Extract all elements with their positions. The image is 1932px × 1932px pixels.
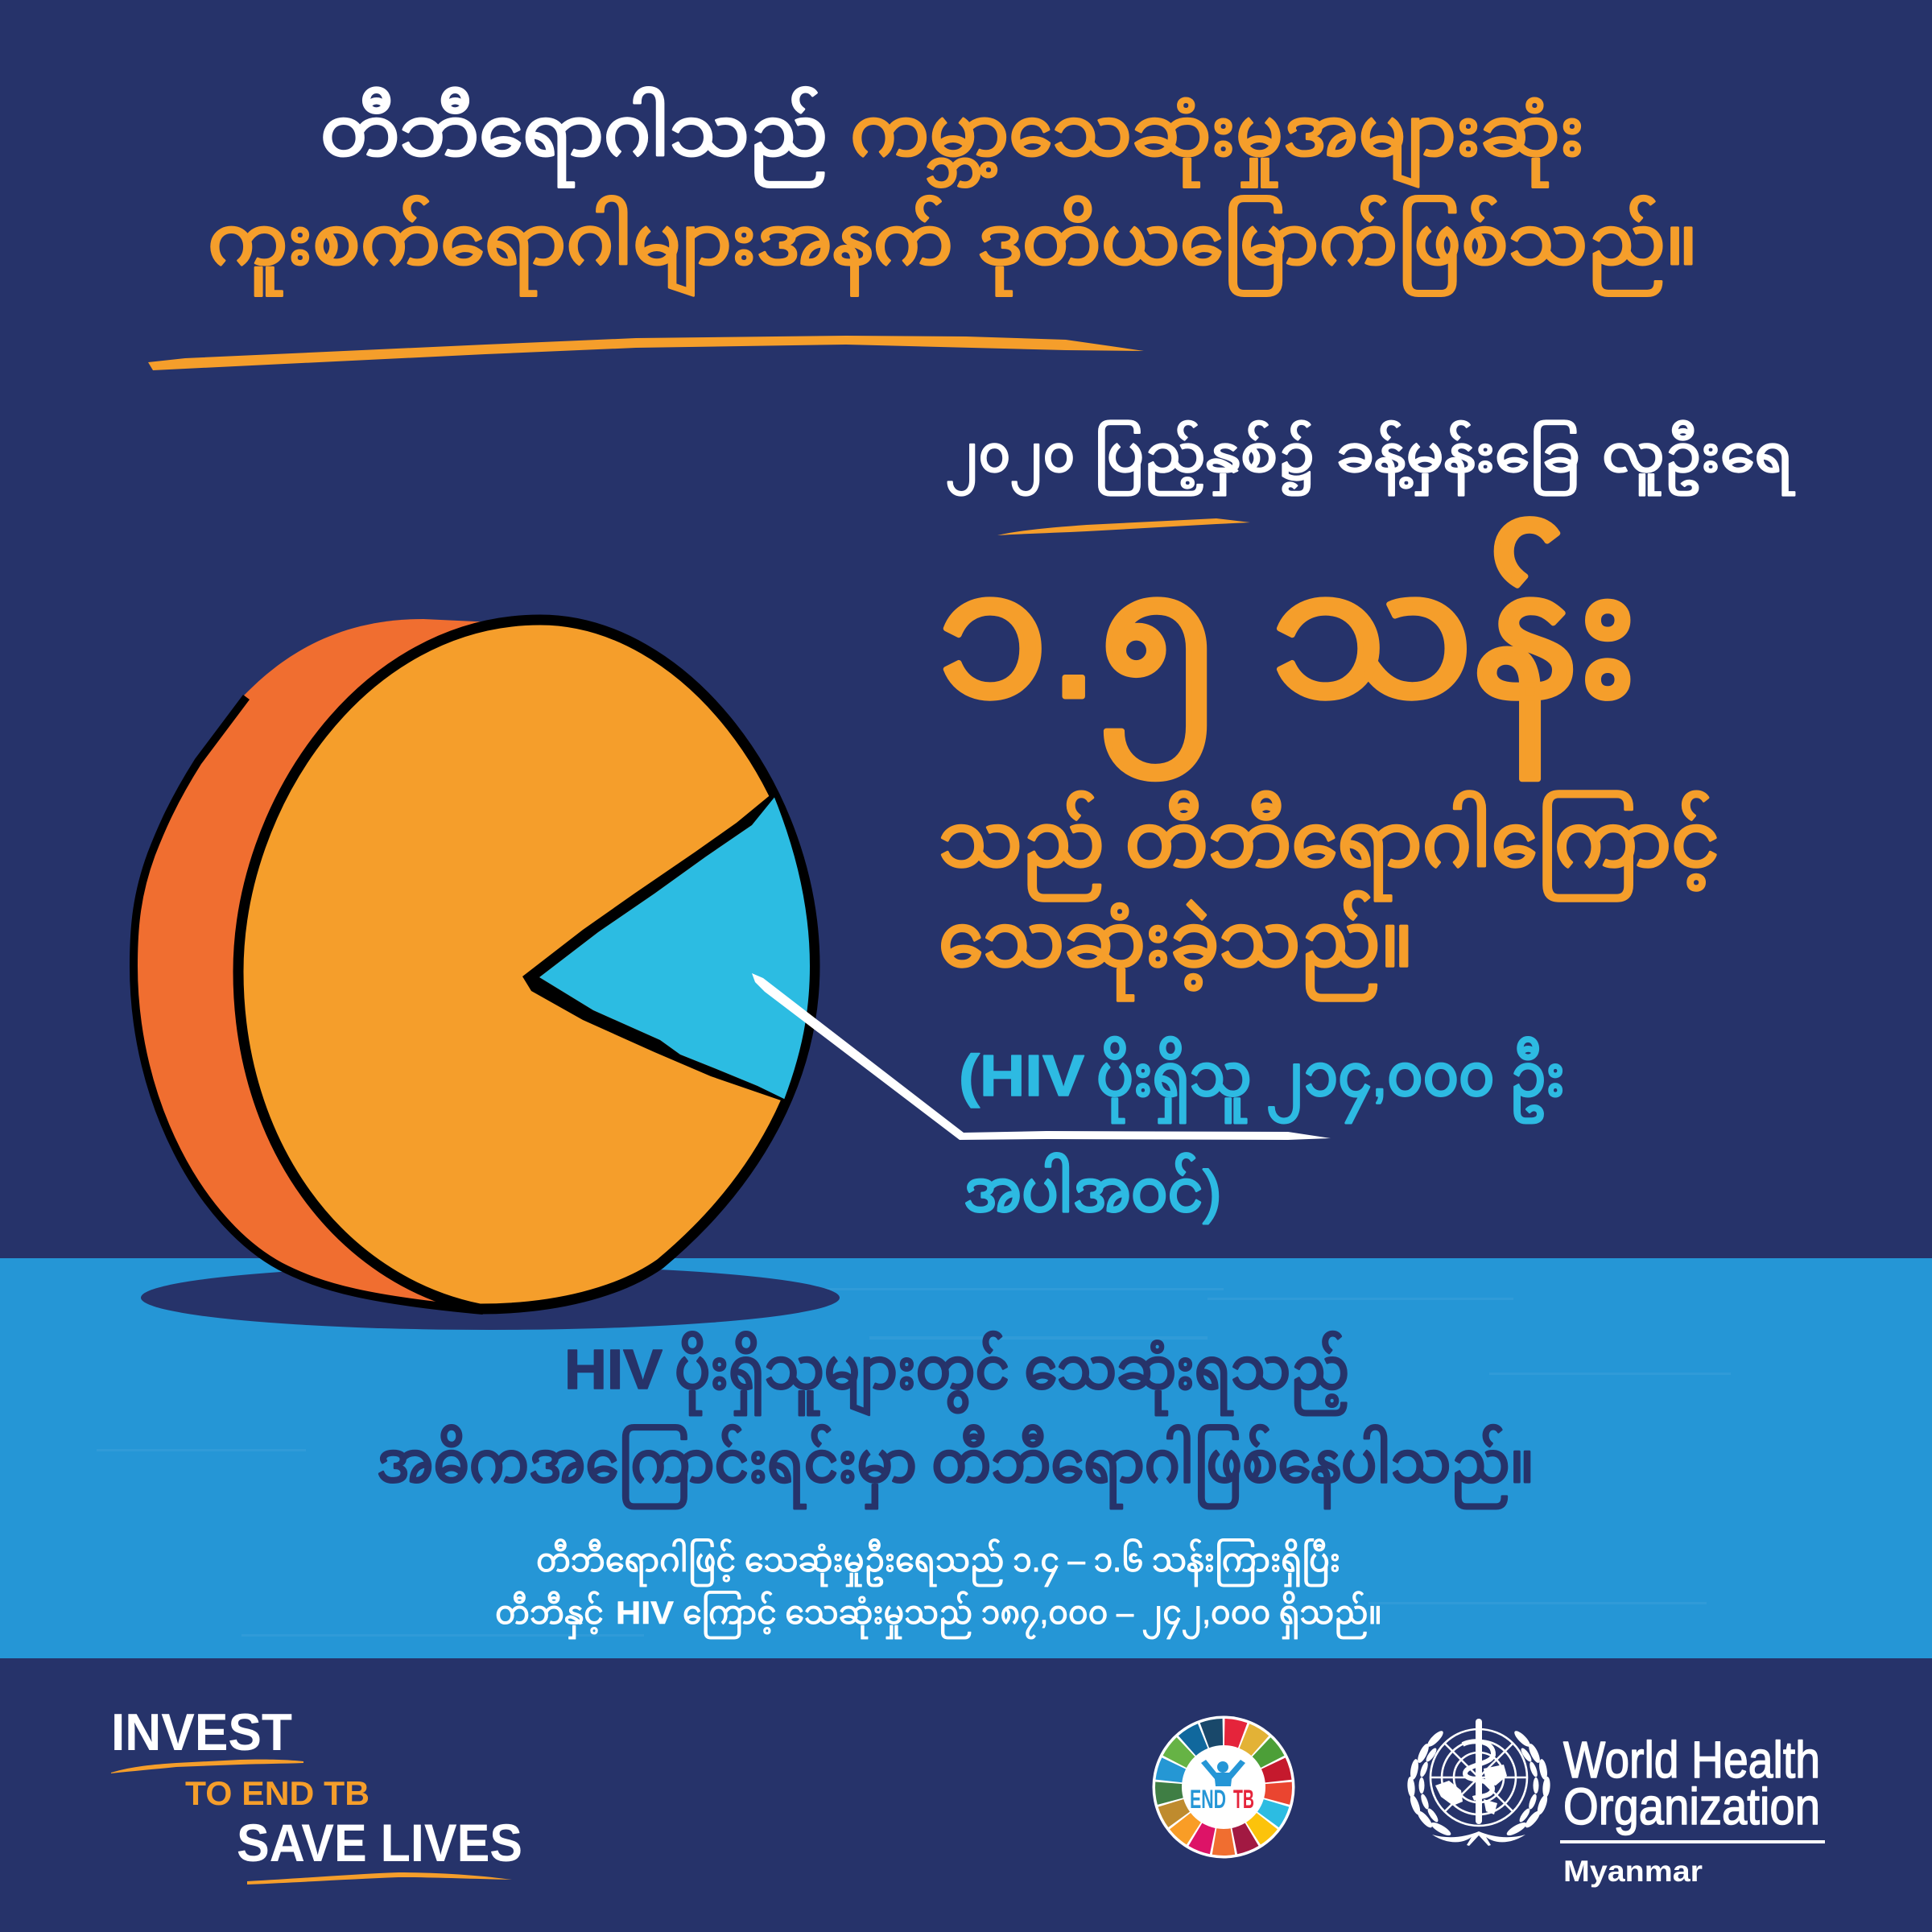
slogan: INVEST [111, 1703, 292, 1761]
logo: End TB: TB [1233, 1785, 1254, 1814]
text: HIV note: အပါအဝင်) [964, 1154, 1221, 1224]
text: HIV cause: HIV [564, 1338, 663, 1401]
text: deaths [939, 791, 1719, 1001]
title underline [148, 336, 1144, 370]
pie chart [134, 619, 815, 1311]
panel: blue band [0, 1258, 1932, 1658]
text: estimated population [946, 419, 1795, 496]
pie face [238, 620, 815, 1309]
title: တီဘီရောဂါသည် [320, 87, 828, 187]
slogan: TO END TB [185, 1774, 369, 1812]
pie back [134, 619, 493, 1311]
pointer line [752, 973, 1331, 1140]
text: HIV note: (HIV [959, 1044, 1084, 1108]
text: HIV note: ပိုးရှိသူ ၂၁၄,၀၀၀ ဦး [1096, 1038, 1565, 1122]
shadow [141, 1265, 840, 1330]
text: deaths: သည် တီဘီရောဂါကြောင့် [939, 791, 1719, 901]
text: HIV note [959, 1038, 1565, 1224]
text: deaths: သေဆုံးခဲ့သည်။ [939, 891, 1414, 1001]
logo: WHO wordmark: Organization [1563, 1777, 1820, 1835]
logo: End TB [1146, 1709, 1302, 1865]
pie slice [539, 795, 810, 1100]
small underline [997, 518, 1250, 535]
big number: ၁.၅ သန်း [936, 519, 1639, 779]
title: ကမ္ဘာ့သေဆုံးမှုအများဆုံး [850, 94, 1584, 188]
slogan [111, 1703, 522, 1885]
text: HIV cause [377, 1332, 1534, 1508]
text: ranges: တီဘီနှင့် [495, 1591, 604, 1639]
title [208, 87, 1698, 296]
text: estimated population: လူဦးရေ [1602, 420, 1795, 496]
logo: WHO wordmark [1560, 1731, 1825, 1888]
text: ranges: တီဘီရောဂါဖြင့် သေဆုံးမှုဦးရေသည် ၁.၄ – ၁.၆ သန်းကြားရှိပြီး [536, 1538, 1340, 1587]
logo: End TB: END [1190, 1785, 1226, 1814]
text: ranges: HIV [616, 1596, 674, 1631]
slogan: SAVE LIVES [237, 1813, 522, 1872]
text: HIV cause: အဓိကအကြောင်းရင်းမှာ တီဘီရောဂါဖြစ်နေပါသည်။ [377, 1426, 1534, 1508]
text: HIV cause: ပိုးရှိသူများတွင် သေဆုံးရသည့် [675, 1332, 1349, 1415]
text: estimated population: ပြည့်နှစ်၌ [1094, 419, 1315, 496]
text: estimated population: ခန့်မှန်းခြေ [1336, 419, 1580, 496]
logo: WHO emblem [1406, 1719, 1551, 1846]
title: ကူးစက်ရောဂါများအနက် [208, 196, 953, 296]
logo: WHO wordmark: World Health [1563, 1731, 1820, 1789]
text: ranges [495, 1538, 1382, 1639]
title: ဒုတိယမြောက်ဖြစ်သည်။ [977, 196, 1698, 295]
logo: WHO wordmark: Myanmar [1563, 1855, 1703, 1888]
text: estimated population: ၂၀၂၀ [946, 427, 1075, 496]
text: ranges: ကြောင့် သေဆုံးမှုသည် ၁၈၇,၀၀၀ – ၂၄၂,၀၀၀ ရှိသည်။ [683, 1591, 1382, 1639]
